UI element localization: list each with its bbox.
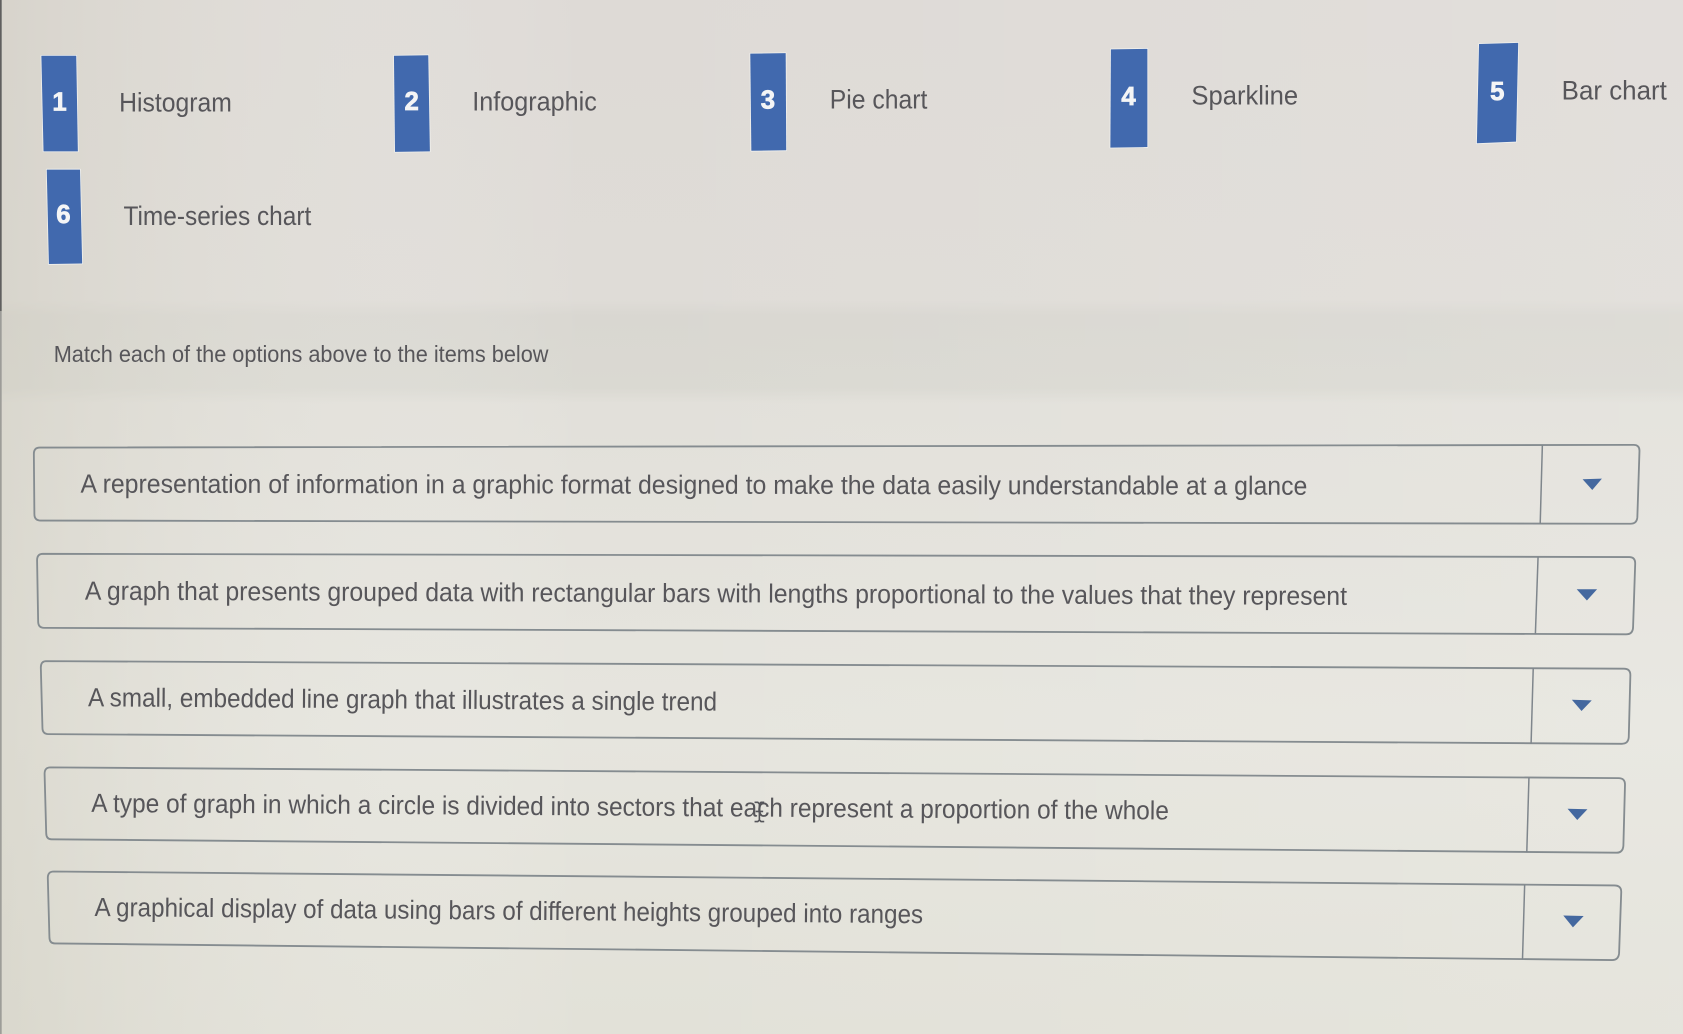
row 5 [48, 872, 1621, 960]
option 4: Sparkline [1110, 49, 1298, 148]
option 2: Infographic [394, 55, 597, 152]
row 1: A representation of information in a graphic format designed to make the data easily understandable at a glance [81, 469, 1307, 501]
option 2: Infographic: Infographic [472, 87, 597, 117]
row 4: A type of graph in which a circle is divided into sectors that each represent a proportion of the whole [91, 788, 1169, 825]
option 4: Sparkline: Sparkline [1191, 81, 1298, 111]
option 1: Histogram [41, 56, 232, 151]
option 5: Bar chart: 5 [1490, 78, 1504, 106]
option 1: Histogram: Histogram [119, 88, 232, 118]
options list [41, 43, 1667, 264]
option 3: Pie chart [750, 53, 928, 151]
matching rows [34, 445, 1639, 960]
row 2 [37, 554, 1635, 634]
row 1 [34, 445, 1639, 524]
instruction text: Match each of the options above to the items below [54, 341, 549, 367]
row 2: A graph that presents grouped data with rectangular bars with lengths proportional to the values that they represent [85, 576, 1348, 611]
option 6: Time-series chart: 6 [56, 201, 71, 229]
row 3 [41, 661, 1630, 744]
option 5: Bar chart: Bar chart [1562, 75, 1667, 105]
row 5: A graphical display of data using bars of different heights grouped into ranges [94, 892, 923, 929]
option 3: Pie chart: 3 [761, 86, 775, 114]
option 3: Pie chart: Pie chart [830, 84, 928, 114]
option 4: Sparkline: 4 [1121, 83, 1136, 111]
option 6: Time-series chart: Time-series chart [123, 201, 312, 231]
row 4 [45, 767, 1625, 853]
option 5: Bar chart [1477, 43, 1667, 143]
option 1: Histogram: 1 [52, 89, 67, 117]
row 3: A small, embedded line graph that illustrates a single trend [88, 682, 717, 717]
text cursor [755, 802, 764, 822]
option 2: Infographic: 2 [404, 88, 419, 116]
option 6: Time-series chart [47, 170, 312, 264]
